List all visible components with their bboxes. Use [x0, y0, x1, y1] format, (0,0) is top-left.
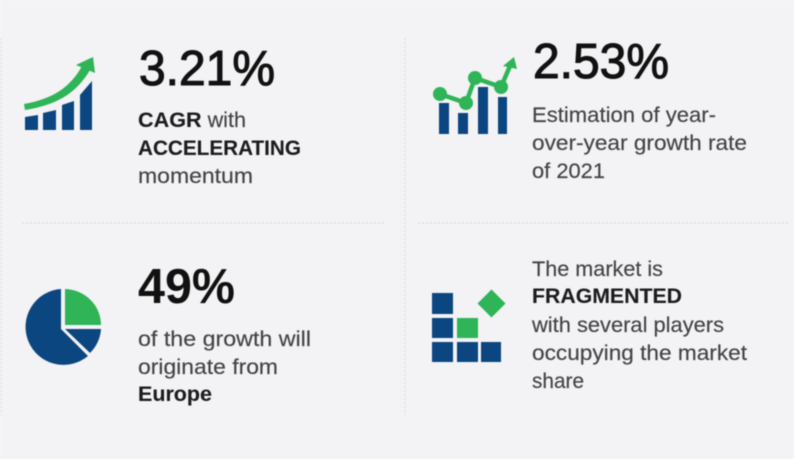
stat: 3.21%: 3.21% [139, 42, 275, 96]
text: market is fragmented: share [532, 370, 584, 393]
panel: CAGR [24, 42, 301, 188]
text: CAGR with accelerating momentum: ACCELERATING [138, 137, 301, 160]
text: estimation of year-over-year growth rate: Estimation of year- [532, 104, 716, 127]
icon: pie chart [26, 289, 101, 365]
text: growth will originate from Europe: originate from [138, 356, 278, 379]
text: growth will originate from Europe: Europe [138, 383, 212, 406]
panel: year-over-year growth [433, 35, 747, 183]
text: market is fragmented: with several players [531, 314, 724, 337]
stat: 49%: 49% [138, 260, 235, 314]
text: estimation of year-over-year growth rate [532, 104, 747, 183]
icon: stacked squares with diamond [432, 290, 506, 362]
text: CAGR with accelerating momentum [138, 109, 301, 188]
text: market is fragmented: occupying the market [532, 342, 747, 365]
text: CAGR with accelerating momentum: momentum [138, 165, 253, 188]
text: growth will originate from Europe [138, 328, 311, 406]
icon: rising bars with arrow [24, 57, 95, 130]
icon: bars with trend line [433, 57, 517, 134]
text: growth will originate from Europe: of the growth will [138, 328, 311, 351]
text: CAGR with accelerating momentum: CAGR with [138, 109, 246, 132]
panel: Europe share [26, 260, 311, 406]
text: market is fragmented: FRAGMENTED [532, 285, 682, 308]
text: market is fragmented: The market is [532, 258, 663, 281]
text: market is fragmented [531, 258, 747, 393]
panel: fragmented market [432, 258, 747, 393]
text: estimation of year-over-year growth rate: of 2021 [532, 160, 605, 183]
text: estimation of year-over-year growth rate: over-year growth rate [532, 132, 747, 155]
stat: 2.53%: 2.53% [533, 35, 669, 89]
